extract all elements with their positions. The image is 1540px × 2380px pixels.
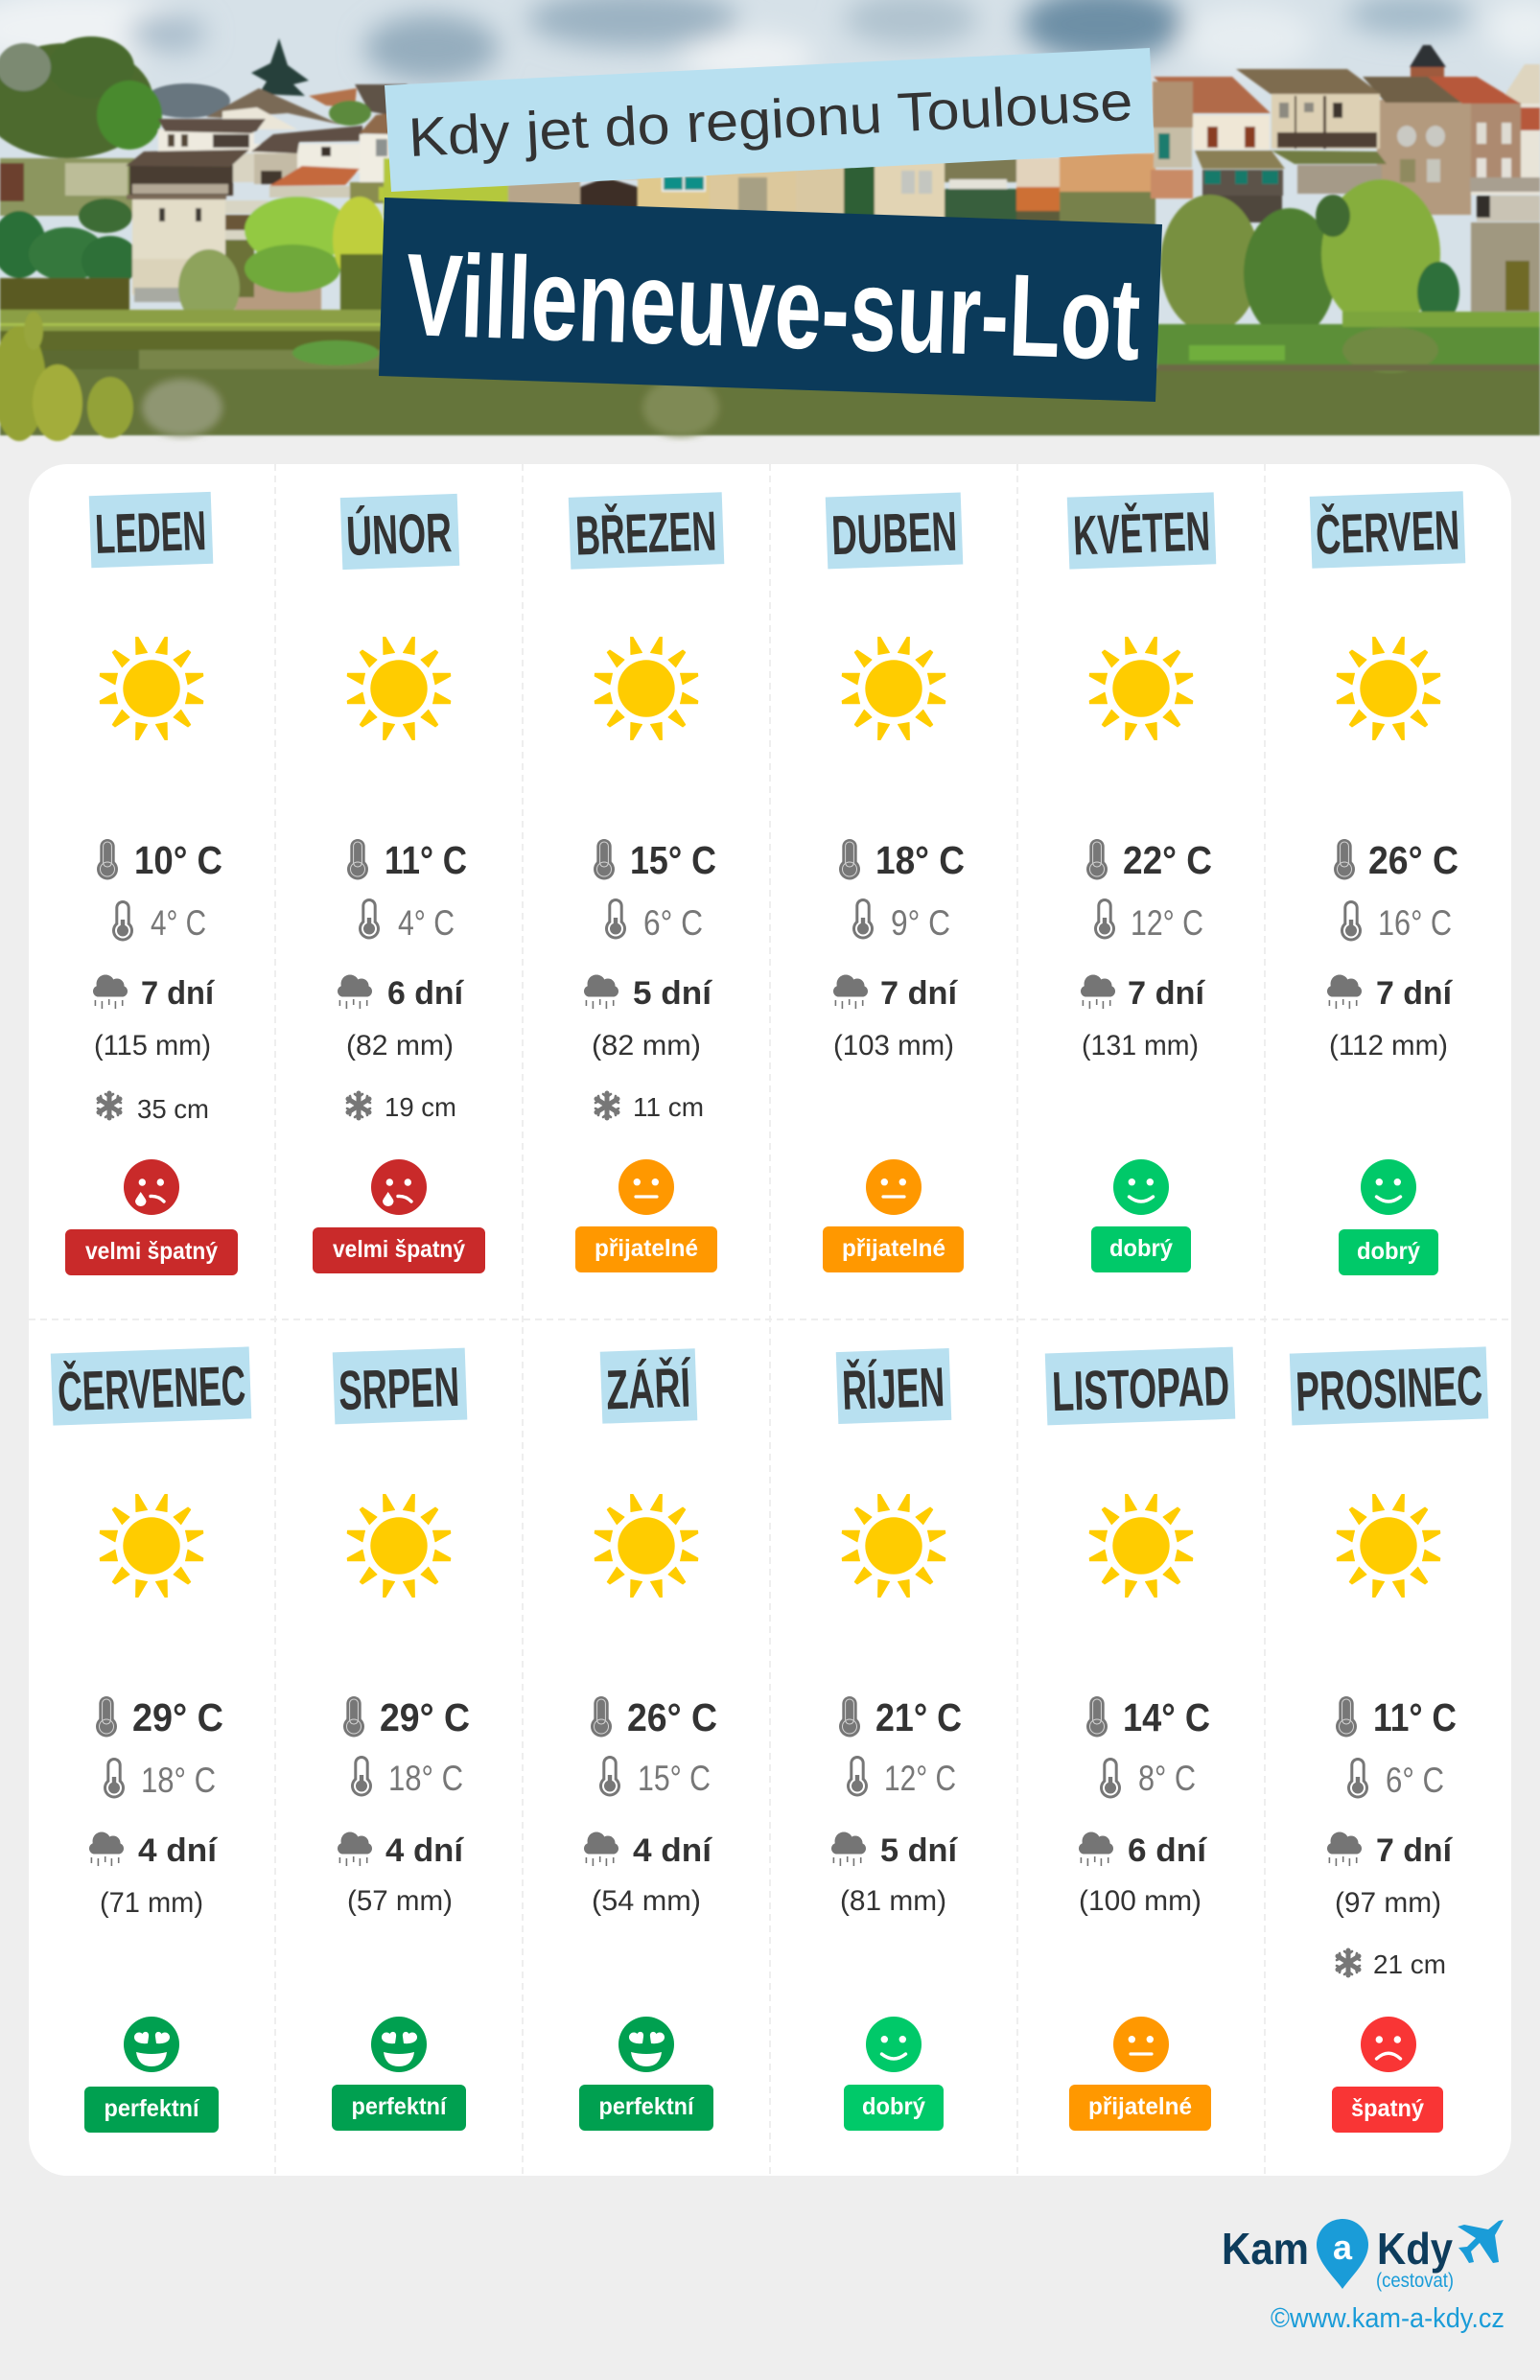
icon: high temperature	[591, 1696, 612, 1738]
low temperature: 6° C	[643, 903, 703, 943]
icon: high temperature	[1086, 1696, 1108, 1738]
month label	[836, 1348, 951, 1424]
icon: snow	[1337, 1950, 1360, 1975]
low temperature: 6° C	[1386, 1761, 1444, 1800]
title banner	[379, 198, 1162, 402]
icon: high temperature	[1334, 839, 1355, 880]
high temperature: 14° C	[1123, 1695, 1210, 1739]
high temperature: 11° C	[1373, 1695, 1457, 1739]
low temperature: 15° C	[638, 1759, 711, 1798]
icon: sun	[842, 637, 945, 740]
stone wall	[1377, 100, 1471, 215]
high temperature: 11° C	[385, 838, 467, 882]
rating face	[1361, 1159, 1416, 1215]
house 1	[158, 129, 254, 152]
rainy days: 6 dní	[387, 975, 465, 1012]
rainy days: 5 dní	[880, 1832, 959, 1869]
month label: LEDEN	[94, 500, 207, 566]
month label: ÚNOR	[345, 502, 453, 568]
high temperature: 18° C	[875, 838, 965, 882]
lattice balcony	[225, 200, 268, 214]
rating badge: velmi špatný	[333, 1236, 465, 1263]
rainfall: (103 mm)	[833, 1030, 954, 1062]
rainy days: 4 dní	[138, 1832, 219, 1869]
month label: DUBEN	[830, 501, 958, 567]
month label	[333, 1348, 467, 1424]
icon: airplane	[1458, 2220, 1504, 2263]
icon: sun	[842, 1494, 945, 1598]
rainy days: 4 dní	[633, 1832, 713, 1869]
rating badge	[313, 1227, 485, 1273]
icon: low temperature	[1100, 1758, 1121, 1799]
month label	[1045, 1347, 1235, 1425]
rainfall: (115 mm)	[94, 1030, 211, 1062]
high temperature: 15° C	[630, 838, 716, 882]
low temperature: 18° C	[141, 1761, 216, 1800]
rating badge: přijatelné	[595, 1235, 698, 1262]
icon: low temperature	[104, 1758, 125, 1799]
icon: sun	[1089, 637, 1193, 740]
icon: rain	[1327, 974, 1362, 1009]
icon: rain	[1081, 974, 1115, 1009]
icon: high temperature	[96, 1696, 117, 1738]
rainy days: 7 dní	[141, 975, 215, 1012]
rainfall: (82 mm)	[592, 1030, 701, 1062]
snowfall: 11 cm	[633, 1092, 704, 1122]
icon: sun	[100, 637, 203, 740]
rating badge	[1091, 1226, 1191, 1272]
icon: rain	[93, 974, 128, 1009]
month label: ČERVENEC	[57, 1355, 246, 1423]
icon: sun	[595, 637, 698, 740]
right building group: far right	[1496, 64, 1540, 108]
rainy days: 7 dní	[1376, 1832, 1454, 1869]
low temperature: 4° C	[151, 903, 206, 943]
month label: BŘEZEN	[574, 500, 717, 568]
month label	[89, 492, 213, 568]
icon: low temperature	[605, 898, 626, 940]
panel: November	[1045, 1347, 1235, 2131]
icon: high temperature	[97, 839, 118, 880]
rating badge: perfektní	[351, 2093, 447, 2120]
icon: sun	[1337, 1494, 1440, 1598]
panel: August	[332, 1348, 470, 2131]
left tree mass	[0, 43, 153, 158]
icon: rain	[338, 974, 372, 1009]
high temperature: 21° C	[875, 1695, 962, 1739]
icon: snow	[347, 1093, 370, 1118]
high temperature: 10° C	[134, 838, 222, 882]
icon: rain	[833, 974, 868, 1009]
icon: sun	[347, 637, 451, 740]
icon: sun	[100, 1494, 203, 1598]
left grass and bank	[0, 310, 384, 331]
upper houses	[206, 88, 340, 125]
gallery house	[230, 153, 254, 182]
icon: high temperature	[1336, 1696, 1357, 1738]
rainfall: (100 mm)	[1079, 1885, 1202, 1917]
panel: February	[313, 494, 485, 1273]
rating face	[866, 1159, 922, 1215]
rating badge: perfektní	[104, 2095, 199, 2122]
rating badge	[844, 2085, 944, 2131]
low temperature: 4° C	[398, 903, 455, 943]
hero photo: river town scene	[0, 0, 1540, 441]
rating face	[1113, 2017, 1169, 2072]
icon: rain	[584, 1832, 618, 1866]
rating face	[866, 2017, 922, 2072]
snowfall: 19 cm	[385, 1092, 456, 1122]
panel: climate card	[29, 464, 1511, 2176]
rating badge	[332, 2085, 466, 2131]
month label	[569, 492, 724, 570]
right grass and bank	[1156, 324, 1540, 370]
rating face	[371, 2017, 427, 2072]
icon: rain	[584, 974, 618, 1009]
logo: Kam a Kdy	[1222, 2219, 1504, 2292]
panel: January	[65, 492, 238, 1275]
panel: December	[1290, 1346, 1488, 2133]
bright trees	[245, 197, 350, 264]
month label	[340, 494, 459, 570]
rating badge: dobrý	[1357, 1238, 1420, 1265]
icon: high temperature	[347, 839, 368, 880]
panel: October	[831, 1348, 962, 2131]
right greenery	[1160, 195, 1260, 333]
rainfall: (82 mm)	[346, 1030, 454, 1062]
left mid bushes and walls	[0, 158, 134, 216]
high temperature: 29° C	[132, 1695, 223, 1739]
icon: low temperature	[852, 898, 874, 940]
rainfall: (81 mm)	[840, 1885, 946, 1917]
rating badge: přijatelné	[1088, 2093, 1192, 2120]
rating badge	[579, 2085, 713, 2131]
month label	[1310, 491, 1465, 569]
icon: snow	[595, 1093, 618, 1118]
icon: rain	[89, 1832, 124, 1866]
icon: low temperature	[112, 900, 133, 942]
icon: rain	[831, 1832, 866, 1866]
icon: sun	[595, 1494, 698, 1598]
panel: April	[823, 493, 965, 1272]
rating badge: dobrý	[1109, 1235, 1173, 1262]
rainy days: 7 dní	[1376, 975, 1454, 1012]
high temperature: 26° C	[627, 1695, 717, 1739]
rating badge	[65, 1229, 238, 1275]
distant hill	[144, 83, 230, 118]
icon: low temperature	[1094, 898, 1115, 940]
bank wall behind trees	[235, 283, 321, 314]
icon: rain	[1079, 1832, 1113, 1866]
rating badge: přijatelné	[842, 1235, 945, 1262]
month label: LISTOPAD	[1051, 1355, 1230, 1423]
icon: low temperature	[1347, 1758, 1368, 1799]
rating face	[124, 2017, 179, 2072]
rating face	[1113, 1159, 1169, 1215]
subtitle banner	[385, 48, 1155, 192]
central buildings strip	[384, 158, 508, 216]
icon: low temperature	[847, 1756, 868, 1797]
rainfall: (57 mm)	[347, 1885, 453, 1917]
rainfall: (112 mm)	[1329, 1030, 1448, 1062]
high temperature: 29° C	[380, 1695, 470, 1739]
rainfall: (54 mm)	[592, 1885, 701, 1917]
tower roof	[1411, 67, 1444, 79]
rating face	[618, 2017, 674, 2072]
rainy days: 7 dní	[880, 975, 959, 1012]
river	[0, 368, 1540, 435]
rating badge	[84, 2087, 219, 2133]
snowfall: 35 cm	[137, 1094, 209, 1124]
month label: ŘÍJEN	[841, 1356, 945, 1422]
rating badge	[823, 1226, 964, 1272]
panel: June	[1310, 491, 1465, 1275]
snowfall: 21 cm	[1373, 1949, 1446, 1979]
logo word Kdy: Kdy	[1377, 2224, 1453, 2274]
month label	[1067, 492, 1216, 570]
rating badge: velmi špatný	[85, 1238, 218, 1265]
rainy days: 6 dní	[1128, 1832, 1208, 1869]
icon: high temperature	[839, 839, 860, 880]
website credit: ©www.kam-a-kdy.cz	[1271, 2303, 1505, 2334]
logo tagline: (cestovat)	[1376, 2270, 1454, 2292]
icon: low temperature	[599, 1756, 620, 1797]
high temperature: 26° C	[1368, 838, 1458, 882]
tiled roof	[269, 166, 360, 186]
rating badge	[1332, 2087, 1443, 2133]
rating face	[618, 1159, 674, 1215]
rainy days: 7 dní	[1128, 975, 1206, 1012]
month label	[51, 1346, 251, 1426]
icon: snow	[98, 1093, 121, 1118]
tower	[132, 199, 225, 295]
house 2	[254, 144, 362, 173]
low temperature: 12° C	[1131, 903, 1203, 943]
icon: low temperature	[1341, 900, 1362, 942]
icon: high temperature	[1086, 839, 1108, 880]
rainy days: 4 dní	[385, 1832, 465, 1869]
month label	[600, 1348, 697, 1424]
rating badge: dobrý	[862, 2093, 925, 2120]
low temperature: 18° C	[388, 1759, 463, 1798]
rainy days: 5 dní	[633, 975, 713, 1012]
rating face	[124, 1159, 179, 1215]
left reeds	[0, 326, 46, 441]
icon: low temperature	[359, 898, 380, 940]
icon: map pin: a	[1333, 2228, 1353, 2267]
low temperature: 16° C	[1378, 903, 1452, 943]
icon: high temperature	[343, 1696, 364, 1738]
rating badge	[1339, 1229, 1438, 1275]
rainfall: (131 mm)	[1082, 1030, 1199, 1062]
high temperature: 22° C	[1123, 838, 1212, 882]
pine tree	[251, 38, 309, 96]
icon: high temperature	[839, 1696, 860, 1738]
panel: September	[579, 1348, 717, 2131]
icon: sun	[1337, 637, 1440, 740]
panel: July	[51, 1346, 251, 2133]
low temperature: 9° C	[891, 903, 950, 943]
rating face	[1361, 2017, 1416, 2072]
month label	[826, 493, 963, 569]
rating badge	[1069, 2085, 1211, 2131]
month label: ZÁŘÍ	[605, 1356, 692, 1422]
rating badge	[575, 1226, 717, 1272]
rainfall: (97 mm)	[1335, 1887, 1441, 1919]
icon: rain	[1327, 1832, 1362, 1866]
rating face	[371, 1159, 427, 1215]
rainfall: (71 mm)	[100, 1887, 203, 1919]
icon: map pin	[1317, 2219, 1368, 2289]
low temperature: 8° C	[1138, 1759, 1196, 1798]
icon: high temperature	[594, 839, 615, 880]
logo word Kam: Kam	[1222, 2224, 1309, 2274]
icon: rain	[338, 1832, 372, 1866]
house 3	[360, 134, 390, 192]
icon: low temperature	[351, 1756, 372, 1797]
month label: SRPEN	[338, 1356, 460, 1422]
rating badge: perfektní	[598, 2093, 694, 2120]
title text: Villeneuve-sur-Lot	[404, 229, 1142, 385]
icon: sun	[1089, 1494, 1193, 1598]
month label: KVĚTEN	[1072, 501, 1211, 567]
panel: March	[569, 492, 724, 1272]
rating badge: špatný	[1351, 2095, 1424, 2122]
low temperature: 12° C	[884, 1759, 956, 1798]
roofs right	[1363, 77, 1463, 103]
lower galleries right	[1195, 151, 1285, 169]
icon: sun	[347, 1494, 451, 1598]
subtitle text: Kdy jet do regionu Toulouse	[407, 71, 1134, 169]
panel: May	[1067, 492, 1216, 1272]
